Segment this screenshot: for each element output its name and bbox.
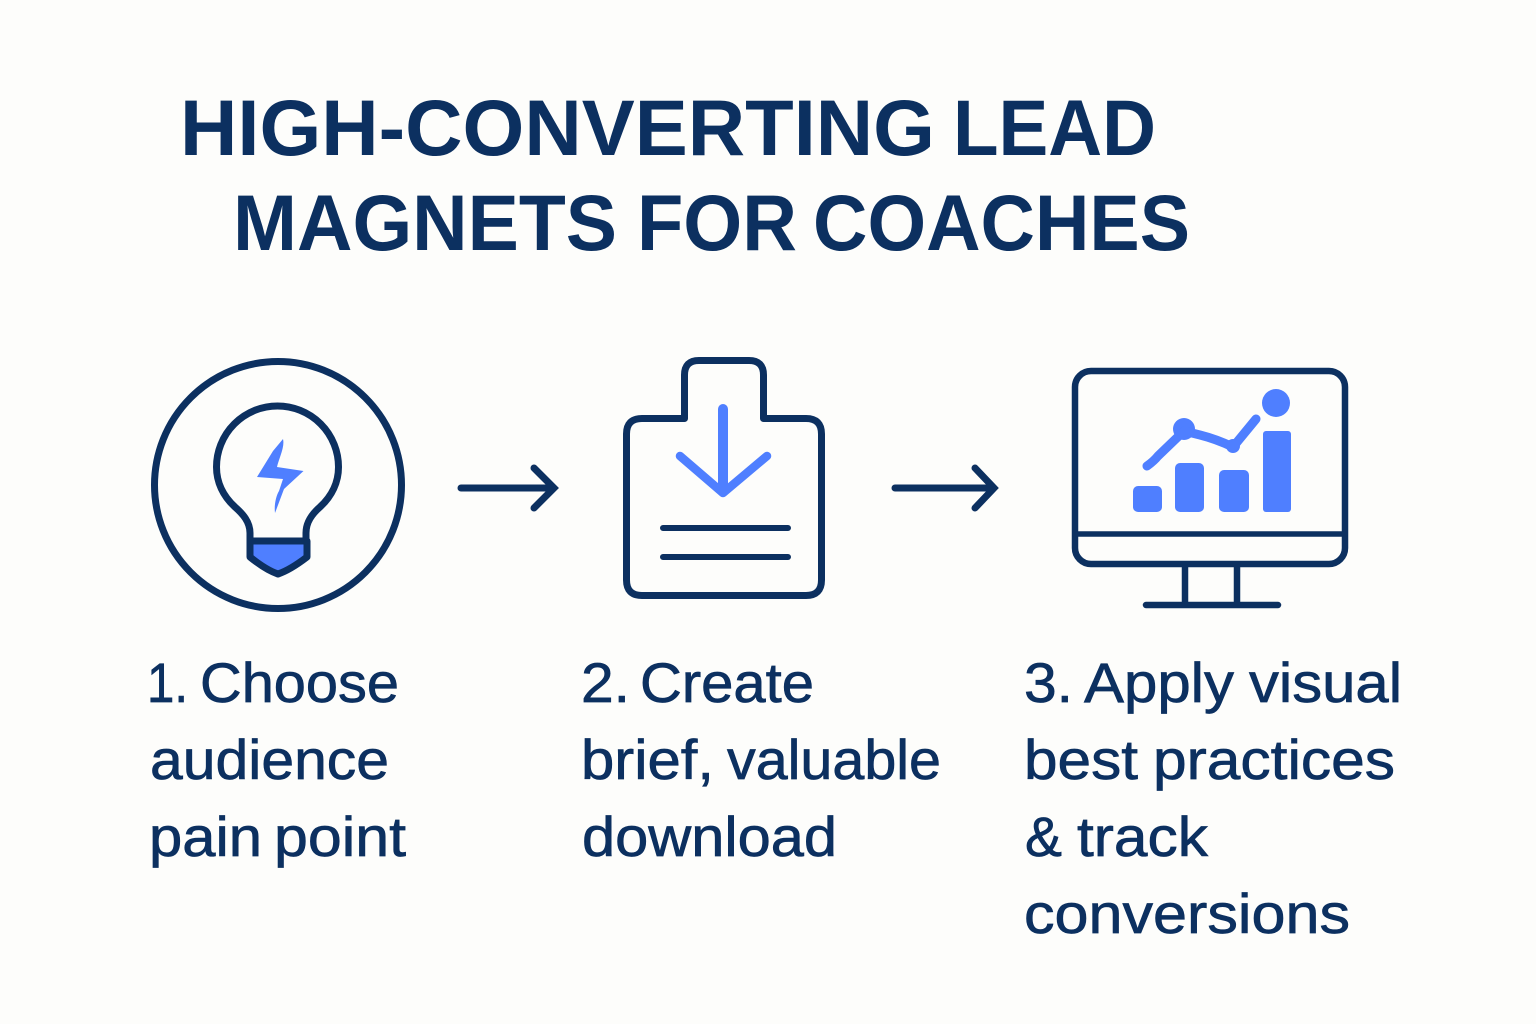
step 1 text <box>147 651 406 868</box>
step 2 text: download <box>582 805 837 868</box>
step 1 text: pain <box>149 805 262 868</box>
icon: download document <box>626 360 822 596</box>
step 2 text: Create <box>640 651 814 714</box>
icon: monitor with growth chart <box>1075 371 1345 605</box>
arrow 1 <box>461 468 554 508</box>
step 2 text: valuable <box>727 728 941 791</box>
step 1 text: audience <box>150 728 389 791</box>
step 2 text: 2. <box>581 651 630 714</box>
icon: light bulb in circle <box>154 362 402 608</box>
title: LEAD <box>953 83 1156 172</box>
title: HIGH-CONVERTING <box>180 83 935 172</box>
step 3 text: & <box>1025 805 1062 868</box>
step 3 text: visual <box>1249 651 1402 714</box>
title: MAGNETS <box>233 178 617 267</box>
step 2 text <box>581 651 941 868</box>
step 3 text: track <box>1077 805 1209 868</box>
title <box>180 83 1190 267</box>
step 3 text: practices <box>1153 728 1395 791</box>
arrow 2 <box>895 468 994 508</box>
step 3 text: conversions <box>1024 882 1350 945</box>
step 1 text: Choose <box>200 651 399 714</box>
step 3 text <box>1024 651 1402 945</box>
title: FOR <box>637 178 797 267</box>
step 3 text: best <box>1024 728 1138 791</box>
title: COACHES <box>813 178 1190 267</box>
step 1 text: 1. <box>147 651 188 714</box>
step 3 text: Apply <box>1084 651 1234 714</box>
step 1 text: point <box>274 805 406 868</box>
step 3 text: 3. <box>1024 651 1073 714</box>
step 2 text: brief, <box>581 728 714 791</box>
